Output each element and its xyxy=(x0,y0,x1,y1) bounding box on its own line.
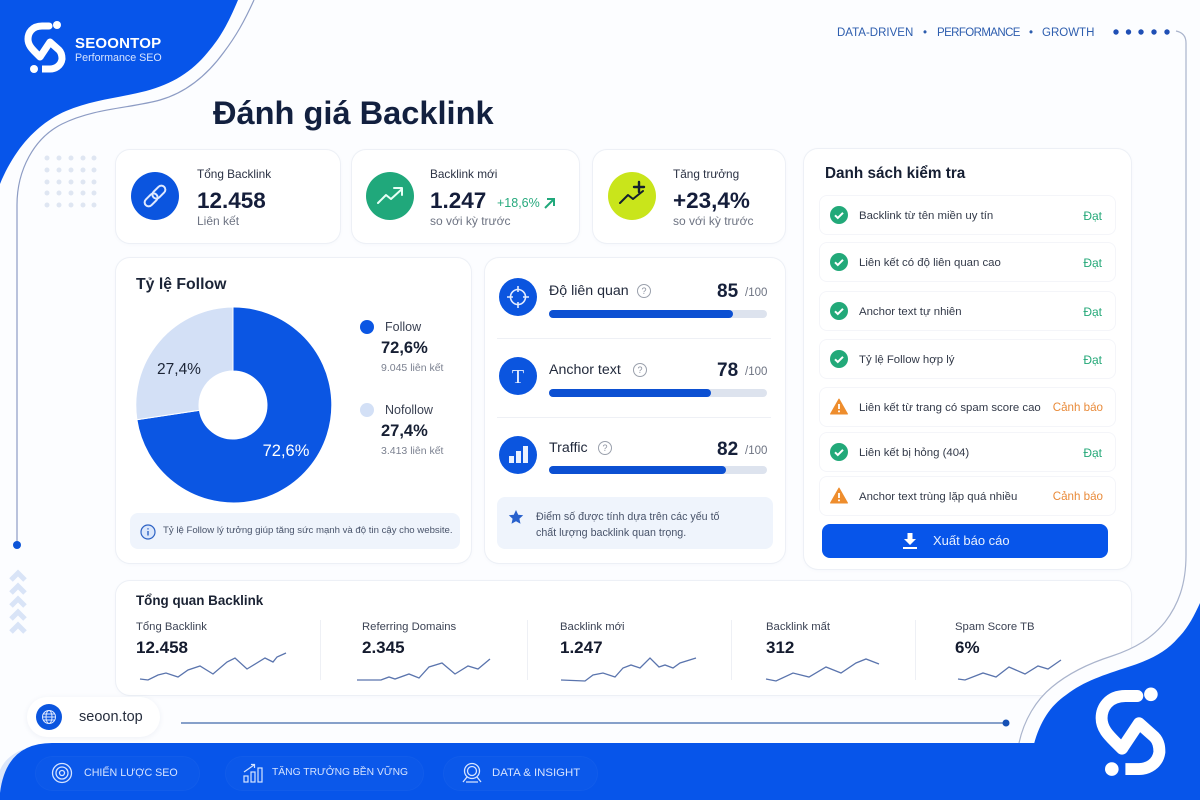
status: Đạt xyxy=(1083,209,1102,223)
metric: new backlinks xyxy=(560,621,696,682)
header tagline: • xyxy=(1029,27,1033,39)
label: Tăng trưởng xyxy=(673,167,739,181)
header tagline: DATA-DRIVEN xyxy=(837,27,913,39)
progress bar xyxy=(549,310,767,318)
logo top-left xyxy=(24,21,66,73)
icon: check xyxy=(830,206,848,224)
website text: seoon.top xyxy=(79,709,143,725)
sparkline xyxy=(561,657,696,682)
note text: Tỷ lệ Follow lý tưởng giúp tăng sức mạnh và độ tin cậy cho website. xyxy=(163,525,452,536)
icon: growth sparkle xyxy=(608,172,656,220)
icon: trend up xyxy=(366,172,414,220)
icon: check xyxy=(830,253,848,271)
chip: data and insight xyxy=(444,757,597,790)
note text xyxy=(536,511,720,539)
status: Cảnh báo xyxy=(1053,490,1103,503)
icon: info xyxy=(140,524,156,540)
score max: /100 xyxy=(745,287,767,299)
text: Anchor text tự nhiên xyxy=(859,306,962,318)
chip: SEO strategy xyxy=(36,757,199,790)
check: follow ratio xyxy=(820,340,1115,378)
icon: download xyxy=(903,533,917,549)
legend: nofollow xyxy=(360,403,444,457)
icon: link xyxy=(131,172,179,220)
status: Đạt xyxy=(1083,305,1102,319)
header tagline xyxy=(837,27,1094,39)
sparkline xyxy=(140,652,286,681)
icon: growth bars xyxy=(243,763,263,783)
icon: help xyxy=(633,363,647,377)
website pill xyxy=(27,697,160,737)
header dots xyxy=(1113,29,1170,35)
metric: referring domains xyxy=(357,621,490,681)
value: 1.247 xyxy=(430,188,486,213)
panel heading: Danh sách kiểm tra xyxy=(825,165,965,182)
icon: target xyxy=(51,762,73,784)
metric: spam score xyxy=(955,621,1062,681)
status: Cảnh báo xyxy=(1053,401,1103,414)
legend: nofollow: 3.413 liên kết xyxy=(381,445,443,457)
score max: /100 xyxy=(745,366,767,378)
stat card: growth xyxy=(593,150,785,243)
icon: help: ? xyxy=(641,286,646,296)
icon: help: ? xyxy=(602,443,608,453)
score value: 82 xyxy=(717,439,738,460)
icon: help: ? xyxy=(637,365,642,375)
change: +18,6% xyxy=(497,196,540,210)
icon: warning xyxy=(830,398,848,414)
unit: Liên kết xyxy=(197,214,239,228)
legend: follow: 72,6% xyxy=(381,339,428,357)
panel heading: Tổng quan Backlink xyxy=(136,593,263,608)
score value: 78 xyxy=(717,360,738,381)
text: Anchor text trùng lặp quá nhiều xyxy=(859,491,1017,503)
panel: checklist xyxy=(804,149,1131,569)
score value: 85 xyxy=(717,281,738,302)
title: Đánh giá Backlink xyxy=(213,94,494,131)
note text: chất lượng backlink quan trọng. xyxy=(536,527,686,539)
value: 6% xyxy=(955,638,980,657)
info note xyxy=(130,513,460,549)
status: Đạt xyxy=(1083,353,1102,367)
label: Spam Score TB xyxy=(955,621,1035,633)
icon: check xyxy=(830,350,848,368)
chip: sustainable growth xyxy=(226,757,423,790)
legend: nofollow: 27,4% xyxy=(381,422,428,440)
sparkline xyxy=(766,658,880,682)
status: Đạt xyxy=(1083,256,1102,270)
metric: lost backlinks xyxy=(766,621,880,682)
icon: star xyxy=(508,510,524,524)
value: 312 xyxy=(766,638,794,657)
metric: total xyxy=(136,621,286,681)
note text: Điểm số được tính dựa trên các yếu tố xyxy=(536,511,720,523)
timeline rule xyxy=(180,718,1010,728)
status: Đạt xyxy=(1083,446,1102,460)
label: Backlink mất xyxy=(766,621,830,633)
value: +23,4% xyxy=(673,188,750,213)
text: Liên kết có độ liên quan cao xyxy=(859,257,1001,269)
value: 1.247 xyxy=(560,638,603,657)
label: Anchor text xyxy=(549,362,621,378)
check: relevance xyxy=(820,243,1115,281)
text: Liên kết từ trang có spam score cao xyxy=(859,402,1041,414)
donut chart: 27,4% xyxy=(157,361,201,378)
panel: backlink overview xyxy=(116,581,1131,695)
check: duplicate anchors warning xyxy=(820,477,1115,515)
donut chart: 72,6% xyxy=(263,442,310,460)
icon: change arrow xyxy=(544,198,555,209)
icon: help xyxy=(637,284,651,298)
sparkline xyxy=(958,660,1062,681)
progress bar xyxy=(549,389,767,397)
legend: follow xyxy=(360,320,444,374)
score max: /100 xyxy=(745,445,767,457)
chevron decoration xyxy=(9,570,27,634)
icon: text xyxy=(499,357,537,395)
label: Backlink mới xyxy=(430,167,497,181)
label: Traffic xyxy=(549,440,588,456)
label: Độ liên quan xyxy=(549,283,629,299)
score note xyxy=(497,497,773,549)
legend: follow: 9.045 liên kết xyxy=(381,362,443,374)
note: so với kỳ trước xyxy=(430,214,510,228)
label: Tổng Backlink xyxy=(136,621,207,633)
note: so với kỳ trước xyxy=(673,214,753,228)
check: spam score warning xyxy=(820,388,1115,426)
icon: check xyxy=(830,443,848,461)
left rail dot xyxy=(13,541,21,549)
brand tagline: Performance SEO xyxy=(75,52,162,64)
value: 12.458 xyxy=(136,638,188,657)
logo bottom-right xyxy=(1088,679,1190,781)
sparkline xyxy=(357,658,490,681)
score: traffic xyxy=(499,436,767,474)
brand name: SEOONTOP xyxy=(75,35,161,52)
panel: follow ratio xyxy=(116,258,471,563)
icon: target xyxy=(499,278,537,316)
icon: check xyxy=(830,302,848,320)
check: natural anchors xyxy=(820,292,1115,330)
value: 2.345 xyxy=(362,638,405,657)
header tagline: PERFORMANCE xyxy=(937,27,1020,39)
text: Backlink từ tên miền uy tín xyxy=(859,210,993,222)
label: Referring Domains xyxy=(362,621,456,633)
text: Tỷ lệ Follow hợp lý xyxy=(859,354,954,366)
icon: text: T xyxy=(512,366,524,388)
icon: warning xyxy=(830,488,848,504)
check: broken links xyxy=(820,433,1115,471)
text: Liên kết bị hỏng (404) xyxy=(859,447,969,459)
export button xyxy=(822,524,1108,558)
icon: bars xyxy=(499,436,537,474)
button label: Xuất báo cáo xyxy=(933,533,1010,548)
chip label: TĂNG TRƯỞNG BỀN VỮNG xyxy=(272,767,408,778)
icon: help xyxy=(598,441,612,455)
header tagline: GROWTH xyxy=(1042,27,1094,39)
icon: globe xyxy=(36,704,62,730)
check: trusted domains xyxy=(820,196,1115,234)
header tagline: • xyxy=(923,27,927,39)
icon: magnifier person xyxy=(461,762,483,784)
panel heading: Tỷ lệ Follow xyxy=(136,276,226,293)
score: anchor text xyxy=(499,357,767,397)
value: 12.458 xyxy=(197,188,266,213)
progress bar xyxy=(549,466,767,474)
label: Tổng Backlink xyxy=(197,167,271,181)
label: Backlink mới xyxy=(560,621,625,633)
stat card: new backlinks xyxy=(352,150,579,243)
donut chart xyxy=(136,308,332,502)
panel: quality scores xyxy=(485,258,785,563)
chip label: DATA & INSIGHT xyxy=(492,767,580,779)
stat card: total backlinks xyxy=(116,150,340,243)
chip label: CHIẾN LƯỢC SEO xyxy=(84,767,178,779)
legend: nofollow: Nofollow xyxy=(385,403,433,417)
score: relevance xyxy=(499,278,767,318)
decorative dot grid xyxy=(44,156,96,208)
legend: follow: Follow xyxy=(385,320,421,334)
